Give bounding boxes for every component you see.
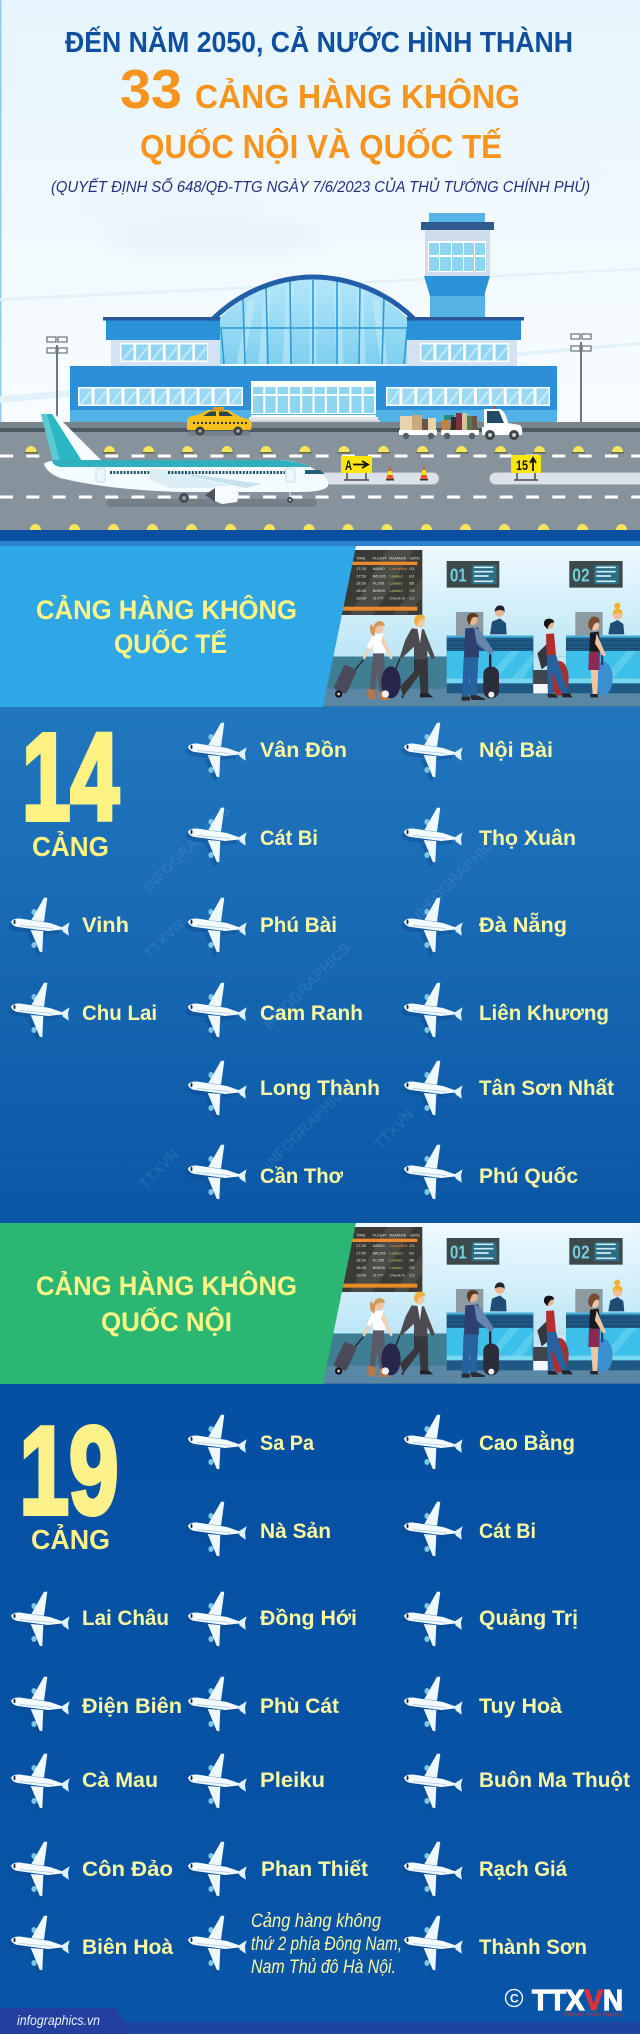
airport: Buôn Ma Thuột — [401, 1754, 630, 1812]
airport: Đồng Hới: Đồng Hới — [260, 1607, 357, 1630]
flight board text: C3 — [409, 595, 415, 600]
flight board text: WE165 — [373, 1250, 387, 1255]
panel: international heading: QUỐC TẾ — [114, 627, 227, 659]
flight board text — [356, 555, 590, 600]
panel: hero background — [0, 0, 640, 430]
logo: TTXVN: Vietnam News Agency — [563, 2011, 623, 2018]
stat: 19 ports: 19 — [20, 1402, 118, 1540]
entrance — [247, 381, 380, 422]
airport: Cần Thơ: Cần Thơ — [260, 1165, 343, 1188]
airport: Quảng Trị — [401, 1592, 578, 1650]
flight board text: BD895 — [373, 588, 386, 593]
flight board text: JL777 — [373, 595, 384, 600]
runway lights row 1 — [24, 446, 624, 454]
stat: 19 ports: CẢNG — [31, 1523, 110, 1555]
airport: Cát Bi — [185, 808, 318, 866]
stat: 14 ports: 14 — [22, 710, 119, 846]
airport: Phú Quốc: Phú Quốc — [479, 1165, 578, 1188]
airport: second Hanoi airport note: thứ 2 phía Đông Nam, — [251, 1934, 402, 1955]
stat: 14 ports — [22, 710, 119, 862]
panel: international heading: CẢNG HÀNG KHÔNG — [36, 593, 297, 625]
airport: Biên Hoà — [8, 1916, 173, 1974]
airport: Phú Bài — [185, 898, 337, 956]
airport: Lai Châu: Lai Châu — [82, 1607, 169, 1630]
airport: Rạch Giá — [401, 1842, 567, 1900]
flight board text: WE165 — [373, 573, 387, 578]
title line 2 — [120, 58, 520, 120]
watermark international — [136, 802, 504, 1193]
flight board text: REMARK — [389, 1232, 407, 1237]
airport: Liên Khương — [401, 983, 609, 1041]
airport: Lai Châu — [8, 1592, 169, 1650]
airport: Cà Mau: Cà Mau — [82, 1769, 158, 1792]
flight board text: FLIGHT — [373, 1232, 387, 1237]
flight board text: KL265 — [373, 1258, 385, 1263]
flight board text: Landed — [389, 581, 403, 586]
flight board text: 02 — [572, 1242, 590, 1263]
airport: Pleiku: Pleiku — [260, 1769, 325, 1792]
flight board text — [356, 1232, 590, 1277]
airport: Thọ Xuân — [401, 808, 576, 866]
watermark international: INFOGRAPHICS — [261, 1079, 354, 1173]
footer source: infographics.vn — [17, 2012, 100, 2028]
stat: 19 ports — [20, 1402, 118, 1555]
flight board text: 18:45 — [356, 1265, 367, 1270]
airport: second Hanoi airport note — [185, 1911, 402, 1978]
flight board text: KL265 — [373, 581, 385, 586]
flight board text: G1 — [409, 1243, 415, 1248]
airport: Chu Lai — [8, 983, 157, 1041]
flight board text: 01 — [450, 1242, 467, 1263]
flight board text: 01 — [450, 565, 467, 586]
airport: second Hanoi airport note: Cảng hàng không — [251, 1911, 381, 1932]
taxiway islands — [320, 472, 640, 484]
panel: international heading — [0, 546, 356, 707]
airport: Sa Pa: Sa Pa — [260, 1432, 314, 1455]
title line 2: CẢNG HÀNG KHÔNG — [195, 77, 520, 115]
flight board text: Cancelled — [389, 566, 407, 571]
traffic cones — [386, 465, 428, 480]
baggage truck — [399, 406, 522, 440]
airport: Cà Mau — [8, 1754, 158, 1812]
flight board text: TIME — [356, 1232, 366, 1237]
flight board text: REMARK — [389, 555, 407, 560]
airport: Phù Cát — [185, 1677, 339, 1735]
header band — [0, 530, 640, 547]
light pole right — [571, 334, 591, 423]
flight board text: GATE — [409, 1232, 420, 1237]
footer band — [0, 2008, 640, 2034]
flight board text: 19:00 — [356, 595, 367, 600]
airport: Nội Bài — [401, 723, 553, 781]
flight board text: Check-in — [389, 595, 405, 600]
airport: Tuy Hoà — [401, 1677, 562, 1735]
airport: Đà Nẵng: Đà Nẵng — [479, 913, 567, 937]
airport: Tân Sơn Nhất: Tân Sơn Nhất — [479, 1077, 614, 1100]
airport: Nội Bài: Nội Bài — [479, 739, 553, 762]
illustration: check-in hall international — [320, 546, 640, 707]
flight board text: Cancelled — [389, 1243, 407, 1248]
panel: domestic heading — [0, 1223, 356, 1384]
airport: Phú Quốc — [401, 1145, 578, 1203]
airport: Nà Sản — [185, 1502, 331, 1560]
flight board text: B5 — [409, 581, 415, 586]
airport: Rạch Giá: Rạch Giá — [479, 1858, 567, 1881]
airport: Điện Biên: Điện Biên — [82, 1695, 182, 1718]
airport: Tuy Hoà: Tuy Hoà — [479, 1695, 562, 1718]
panel: domestic list background — [0, 1384, 640, 2022]
dome — [212, 277, 415, 364]
flight board text: C5 — [409, 588, 415, 593]
flight board text: BD895 — [373, 1265, 386, 1270]
flight board text: K2 — [409, 1250, 415, 1255]
airport: Côn Đảo — [8, 1842, 173, 1900]
airport: Cao Bằng: Cao Bằng — [479, 1431, 575, 1455]
flight board text: FLIGHT — [373, 555, 387, 560]
airport: Vinh: Vinh — [82, 914, 129, 937]
flight board text: 17:50 — [356, 573, 367, 578]
logo: TTXVN: C — [510, 1992, 519, 2006]
flight board text: C3 — [409, 1272, 415, 1277]
flight board text: 18:45 — [356, 588, 367, 593]
panel: domestic heading: CẢNG HÀNG KHÔNG — [36, 1269, 297, 1301]
illustration: check-in hall domestic — [320, 1223, 640, 1384]
flight board text: 19:00 — [356, 1272, 367, 1277]
airport: Điện Biên — [8, 1677, 182, 1735]
flight board text: 17:20 — [356, 1243, 367, 1248]
airport: Sa Pa — [185, 1415, 314, 1473]
airport: Vân Đồn: Vân Đồn — [260, 739, 347, 762]
airport: Cam Ranh: Cam Ranh — [260, 1002, 363, 1025]
road — [0, 422, 640, 530]
stat: 14 ports: CẢNG — [32, 830, 109, 862]
logo: TTXVN: TTXVN — [532, 1985, 623, 2017]
flight board text: 02 — [572, 565, 590, 586]
airport: Thọ Xuân: Thọ Xuân — [479, 827, 576, 850]
flight board text: Landed — [389, 588, 403, 593]
sign: A arrow: A — [345, 457, 352, 473]
airport: Pleiku — [185, 1754, 325, 1812]
taxi — [187, 407, 252, 436]
flight board text: Landed — [389, 1265, 403, 1270]
flight board text: Landed — [389, 1250, 403, 1255]
flight board text: TIME — [356, 555, 366, 560]
airport: Cát Bi domestic: Cát Bi — [479, 1520, 536, 1543]
title line 3: QUỐC NỘI VÀ QUỐC TẾ — [140, 127, 502, 165]
airport: Phan Thiết: Phan Thiết — [261, 1858, 368, 1881]
airport: Phú Bài: Phú Bài — [260, 914, 337, 937]
watermark international: TTXVN — [141, 916, 188, 963]
runway lights row 2 — [30, 524, 627, 530]
flight board text: Landed — [389, 1258, 403, 1263]
sign: 15 arrow: 15 — [516, 457, 528, 473]
title line 2: 33 — [120, 58, 182, 120]
flight board text: 18:30 — [356, 581, 367, 586]
flight board text: 18:30 — [356, 1258, 367, 1263]
airplane on runway — [41, 414, 328, 507]
title line 1: ĐẾN NĂM 2050, CẢ NƯỚC HÌNH THÀNH — [65, 25, 573, 59]
sign: A arrow — [341, 456, 372, 480]
airport: Thành Sơn — [401, 1916, 587, 1974]
airport: Nà Sản: Nà Sản — [260, 1520, 331, 1543]
airport: Long Thành: Long Thành — [260, 1077, 380, 1100]
sign: 15 arrow — [511, 455, 541, 480]
airport: Quảng Trị: Quảng Trị — [479, 1607, 578, 1630]
watermark international: INFOGRAPHICS — [141, 802, 234, 896]
subtitle: (QUYẾT ĐỊNH SỐ 648/QĐ-TTG NGÀY 7/6/2023 CỦA THỦ TƯỚNG CHÍNH PHỦ) — [51, 177, 590, 196]
flight board text: B5 — [409, 1258, 415, 1263]
watermark international: TTXVN — [136, 1146, 183, 1193]
terminal building — [70, 277, 557, 422]
airport: Thành Sơn: Thành Sơn — [479, 1936, 587, 1959]
airport: Cần Thơ — [185, 1145, 343, 1203]
airport: Cát Bi domestic — [401, 1502, 536, 1560]
panel: international list background — [0, 707, 640, 1223]
airport: Cam Ranh — [185, 983, 363, 1041]
airport: Long Thành — [185, 1061, 380, 1119]
watermark international: TTXVN — [371, 1106, 418, 1153]
flight board text: Check-in — [389, 1272, 405, 1277]
flight board text: K2 — [409, 573, 415, 578]
airport: Côn Đảo: Côn Đảo — [82, 1858, 173, 1881]
airport: Biên Hoà: Biên Hoà — [82, 1936, 173, 1959]
airport: Tân Sơn Nhất — [401, 1061, 614, 1119]
airport: Liên Khương: Liên Khương — [479, 1002, 609, 1025]
flight board text: 17:50 — [356, 1250, 367, 1255]
airport: Đà Nẵng — [401, 898, 567, 956]
flight board text: C5 — [409, 1265, 415, 1270]
airport: Chu Lai: Chu Lai — [82, 1002, 157, 1025]
control tower — [421, 213, 494, 321]
airport: Cao Bằng — [401, 1415, 575, 1473]
airport: Cát Bi: Cát Bi — [260, 827, 318, 850]
flight board text: 17:20 — [356, 566, 367, 571]
flight board text: AB940 — [373, 1243, 385, 1248]
flight board text: GATE — [409, 555, 420, 560]
flight board text: G1 — [409, 566, 415, 571]
flight board text: Landed — [389, 573, 403, 578]
airport: Buôn Ma Thuột: Buôn Ma Thuột — [479, 1769, 630, 1792]
airport: second Hanoi airport note: Nam Thủ đô Hà Nội. — [251, 1957, 396, 1978]
airport: Vân Đồn — [185, 723, 347, 781]
flight board text: JL777 — [373, 1272, 384, 1277]
flight board text: AB940 — [373, 566, 385, 571]
airport: Phù Cát: Phù Cát — [260, 1695, 339, 1718]
light pole left — [47, 337, 67, 422]
panel: domestic heading: QUỐC NỘI — [101, 1305, 232, 1337]
airport: Phan Thiết — [185, 1842, 368, 1900]
watermark international: INFOGRAPHICS — [261, 939, 354, 1033]
watermark international: INFOGRAPHICS — [411, 829, 504, 923]
airport: Vinh — [8, 898, 129, 956]
airport: Đồng Hới — [185, 1592, 357, 1650]
